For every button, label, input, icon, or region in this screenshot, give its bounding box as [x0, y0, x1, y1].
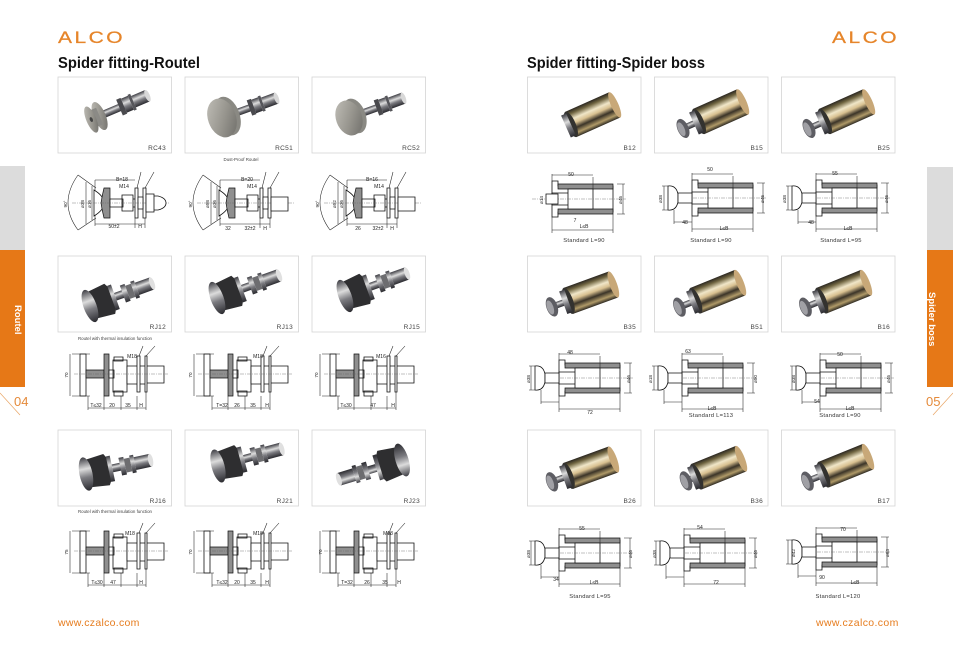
drawing: RJ13: T=32 [216, 403, 228, 409]
panel: B12 [528, 77, 641, 153]
panel: RJ13 [185, 256, 298, 332]
drawing: RJ16: 75 [64, 549, 69, 555]
drawing: B25 [782, 171, 890, 232]
drawing: B36: ø46 [753, 550, 758, 558]
panel: B36 [654, 430, 768, 506]
drawing: RJ15: 70 [314, 372, 319, 378]
drawing: B36: 54 [697, 525, 703, 531]
drawing: RC51: M14 [247, 184, 257, 190]
drawing: RJ13: 35 [250, 403, 256, 409]
drawing: RJ21 [188, 523, 292, 587]
drawing: B35: 48 [567, 350, 573, 356]
drawing: RJ15 [314, 346, 418, 410]
panel: RC52: RC52 [402, 145, 420, 152]
drawing: B17: 90 [819, 575, 825, 581]
drawing: RJ13 [188, 346, 292, 410]
drawing: RC43 [63, 172, 170, 230]
drawing: B26: ø46 [628, 550, 633, 558]
drawing: RJ21: T≤32 [216, 580, 228, 586]
drawing: RJ23: M18 [383, 531, 393, 537]
drawing: RC51: ø58 [205, 200, 210, 208]
drawing: RC52: H [390, 226, 394, 232]
drawing: B17 [786, 527, 890, 586]
drawing: RJ23: T=32 [341, 580, 353, 586]
panel: B12: B12 [624, 145, 636, 152]
drawing: RJ13: 26 [234, 403, 240, 409]
drawing: B35 [526, 350, 633, 416]
drawing: B12: ø46 [618, 196, 623, 204]
drawing: B26: 55 [579, 526, 585, 532]
panel: B26 [528, 430, 641, 506]
drawing: RJ16: T≤30 [91, 580, 103, 586]
panel: RJ21: RJ21 [277, 498, 293, 505]
drawing: RC51: H [263, 226, 267, 232]
drawing: RJ21: H [265, 580, 269, 586]
panel: RC43: RC43 [148, 145, 166, 152]
panel: RJ15 [312, 256, 426, 332]
panel: RJ13: RJ13 [277, 324, 293, 331]
caption: B51 standard: Standard L=113 [689, 413, 733, 419]
drawing: RC52 [315, 172, 422, 232]
drawing: RJ23: 70 [318, 549, 323, 555]
drawing: RJ21: 35 [250, 580, 256, 586]
drawing: RJ12: 20 [109, 403, 115, 409]
panel: RC51 [185, 77, 298, 153]
drawing: B35: ø38 [526, 375, 531, 383]
caption: B25 standard: Standard L=95 [820, 238, 862, 244]
drawing: B15: 48 [682, 220, 688, 226]
drawing: B51: 63 [685, 349, 691, 355]
drawing: RJ16: 47 [110, 580, 116, 586]
drawing: RC43: B=18 [116, 177, 128, 183]
drawing: B26: L≤B [590, 580, 599, 586]
drawing: RJ21: 70 [188, 549, 193, 555]
drawing: B17: ø63 [885, 549, 890, 557]
panel: B17: B17 [878, 498, 890, 505]
drawing: RC52: 90° [315, 200, 320, 207]
panel: RC43 [58, 77, 172, 153]
drawing: RC51: 90° [188, 200, 193, 207]
drawing: RC52: 32±2 [372, 226, 384, 232]
drawing: B51 [648, 349, 758, 412]
drawing: RJ16: H [139, 580, 143, 586]
drawing: RC51: 32±2 [244, 226, 256, 232]
panel: B16: B16 [878, 324, 890, 331]
caption: B16 standard: Standard L=90 [819, 413, 861, 419]
panel: B25: B25 [878, 145, 890, 152]
drawing: B36 [652, 525, 758, 587]
drawing: RC43: 50±2 [108, 224, 120, 230]
panel: B25 [782, 77, 895, 153]
drawing: RJ12 [64, 346, 168, 410]
panel: B15: B15 [751, 145, 763, 152]
drawing: B12: 50 [568, 172, 574, 178]
panel: RJ21 [185, 430, 298, 506]
drawing: RC43: ø38 [80, 200, 85, 208]
drawing: RC43: M14 [119, 184, 129, 190]
caption: B26 standard: Standard L=95 [569, 594, 611, 600]
drawing: B12: 7 [574, 218, 577, 224]
caption: B12 standard: Standard L=90 [563, 238, 605, 244]
left website url: www.czalco.com [57, 617, 140, 629]
panel: B35 [528, 256, 641, 332]
drawing: B25: 48 [808, 220, 814, 226]
drawing: RJ12: T≤32 [90, 403, 102, 409]
drawing: B16 [790, 352, 894, 412]
drawing: B35: ø46 [626, 375, 631, 383]
drawing: RC52: 26 [355, 226, 361, 232]
drawing: B16: ø38 [791, 375, 796, 383]
drawing: B51: ø50 [753, 375, 758, 383]
drawing: B26: ø38 [526, 550, 531, 558]
drawing: B12 [532, 172, 626, 233]
right page number [926, 393, 953, 415]
drawing: RJ21: M18 [253, 531, 263, 537]
drawing: B12: L≤B [580, 224, 589, 230]
drawing: B16: ø46 [886, 375, 891, 383]
drawing: B16: 50 [837, 352, 843, 358]
drawing: RC51: B=20 [241, 177, 253, 183]
drawing: B15 [658, 167, 766, 232]
panel: RJ12 [58, 256, 172, 332]
drawing: B17: L≤B [851, 580, 860, 586]
drawing: B51: L≤B [708, 406, 717, 412]
drawing: RJ15: H [391, 403, 395, 409]
right page heading: Spider fitting-Spider boss [527, 55, 705, 72]
drawing: RJ12: 35 [125, 403, 131, 409]
drawing: RC52: B=16 [366, 177, 378, 183]
drawing: RC43: 90° [63, 200, 68, 207]
drawing: RC52: ø52 [332, 200, 337, 208]
drawing: RC52: M14 [374, 184, 384, 190]
drawing: RJ15: 47 [370, 403, 376, 409]
drawing: B25: L≤B [844, 226, 853, 232]
drawing: RJ16 [64, 523, 168, 587]
drawing: B15: L≤B [720, 226, 729, 232]
caption: dust-proof: Dust-Proof Routel [224, 157, 258, 162]
drawing: B16: L≤B [846, 406, 855, 412]
left page number: 04 [14, 394, 28, 409]
drawing: RJ15: M16 [376, 354, 386, 360]
drawing: RJ12: 70 [64, 372, 69, 378]
right side tab: Spider boss [926, 292, 937, 346]
right page number: 05 [926, 394, 940, 409]
drawing: B26: 34 [553, 577, 559, 583]
panel: B51: B51 [751, 324, 763, 331]
drawing: B25: 55 [832, 171, 838, 177]
drawing: B51: ø18 [648, 375, 653, 383]
drawing: RC43: H [138, 224, 142, 230]
panel: RJ23 [312, 430, 426, 506]
drawing: B17: 70 [840, 527, 846, 533]
drawing: RJ21: 20 [234, 580, 240, 586]
drawing: RC52: ø36 [339, 200, 344, 208]
left page logo: ALCO [58, 28, 125, 47]
drawing: B25: ø38 [782, 195, 787, 203]
panel: RC52 [312, 77, 426, 153]
right page logo: ALCO [832, 28, 899, 47]
drawing: B15: ø46 [760, 195, 765, 203]
drawing: B35: 72 [587, 410, 593, 416]
right side tab [926, 167, 953, 387]
panel: RJ16 [58, 430, 172, 506]
drawing: RJ13: H [265, 403, 269, 409]
left page heading: Spider fitting-Routel [58, 55, 200, 72]
drawing: RJ13: 70 [188, 372, 193, 378]
drawing: RJ12: H [139, 403, 143, 409]
panel: RJ12: RJ12 [150, 324, 166, 331]
caption: B15 standard: Standard L=90 [690, 238, 732, 244]
caption: thermal insulation: Routel with thermal insulation function [78, 336, 153, 341]
drawing: RC51: ø36 [212, 200, 217, 208]
drawing: RJ12: M18 [127, 354, 137, 360]
drawing: RC43: ø16 [87, 200, 92, 208]
drawing: RJ23: 26 [364, 580, 370, 586]
caption: B17 standard: Standard L=120 [816, 594, 860, 600]
left side tab [0, 166, 25, 387]
drawing: B17: ø42 [791, 549, 796, 557]
panel: B16 [782, 256, 895, 332]
panel: RC51: RC51 [275, 145, 293, 152]
panel: B17 [782, 430, 895, 506]
panel: RJ16: RJ16 [150, 498, 166, 505]
caption: thermal insulation second: Routel with thermal insulation function [78, 509, 153, 514]
panel: RJ23: RJ23 [404, 498, 420, 505]
drawing: B16: 54 [814, 399, 820, 405]
panel: B15 [654, 77, 768, 153]
panel: RJ15: RJ15 [404, 324, 420, 331]
panel: B51 [654, 256, 768, 332]
panel: B26: B26 [624, 498, 636, 505]
left page number [0, 393, 28, 415]
drawing: B36: 72 [713, 580, 719, 586]
drawing: RJ23: H [397, 580, 401, 586]
drawing: RJ13: M18 [253, 354, 263, 360]
drawing: RJ23 [318, 523, 418, 587]
drawing: RC51 [188, 172, 295, 232]
drawing: RJ23: 35 [382, 580, 388, 586]
panel: B35: B35 [624, 324, 636, 331]
drawing: RC51: 32 [225, 226, 231, 232]
panel: B36: B36 [751, 498, 763, 505]
drawing: B12: ø14 [539, 196, 544, 204]
drawing: B36: ø38 [652, 550, 657, 558]
drawing: RJ16: M18 [125, 531, 135, 537]
drawing: B25: ø46 [884, 195, 889, 203]
drawing: B15: 50 [707, 167, 713, 173]
left side tab: Routel [12, 305, 23, 335]
right website url: www.czalco.com [815, 617, 899, 629]
drawing: B15: ø38 [658, 195, 663, 203]
drawing: RJ15: T≤30 [340, 403, 352, 409]
drawing: B26 [526, 526, 633, 587]
